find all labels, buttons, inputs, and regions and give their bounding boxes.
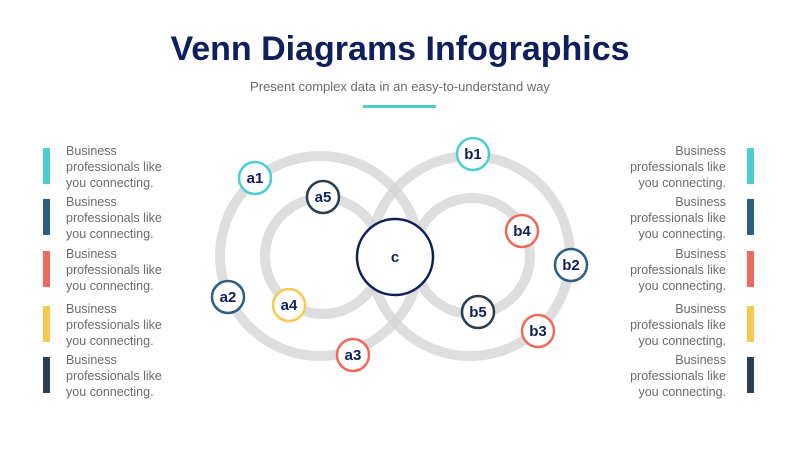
left legend item 3: [43, 247, 162, 293]
right legend item 4: [630, 302, 754, 348]
left legend item 5: professionals like: [66, 369, 162, 383]
node a5: a5: [315, 189, 331, 206]
node a4: [273, 289, 305, 321]
left legend item 1: Business: [66, 144, 117, 158]
right legend item 4: professionals like: [630, 318, 726, 332]
node b4: b4: [513, 223, 531, 240]
left legend item 3: you connecting.: [66, 279, 154, 293]
node a1: [239, 162, 271, 194]
left legend item 5: [43, 353, 162, 399]
right legend item 2: professionals like: [630, 211, 726, 225]
left legend item 1: professionals like: [66, 160, 162, 174]
node a1: a1: [247, 170, 263, 187]
left legend item 5: Business: [66, 353, 117, 367]
right legend item 1: Business: [675, 144, 726, 158]
left legend item 1: [43, 144, 162, 190]
right legend item 4: you connecting.: [638, 334, 726, 348]
left legend item 4: professionals like: [66, 318, 162, 332]
right legend item 3: [630, 247, 754, 293]
right legend item 5: Business: [675, 353, 726, 367]
left legend item 2: professionals like: [66, 211, 162, 225]
left legend item 3: Business: [66, 247, 117, 261]
left legend item 4: Business: [66, 302, 117, 316]
right legend item 1: you connecting.: [638, 176, 726, 190]
node a3: [337, 339, 369, 371]
center circle c: [357, 219, 433, 295]
left legend item 2: you connecting.: [66, 227, 154, 241]
node b2: b2: [562, 257, 580, 274]
node b3: b3: [529, 323, 547, 340]
right legend item 5: [630, 353, 754, 399]
right legend item 1: [630, 144, 754, 190]
right legend item 5: you connecting.: [638, 385, 726, 399]
right legend item 3: professionals like: [630, 263, 726, 277]
node b1: b1: [464, 146, 482, 163]
left legend item 3: professionals like: [66, 263, 162, 277]
left legend item 2: Business: [66, 195, 117, 209]
right legend item 5: professionals like: [630, 369, 726, 383]
right legend item 2: [630, 195, 754, 241]
right legend item 3: you connecting.: [638, 279, 726, 293]
right legend item 2: you connecting.: [638, 227, 726, 241]
rings: [220, 156, 570, 356]
node b2: [555, 249, 587, 281]
right legend item 1: professionals like: [630, 160, 726, 174]
accent line: [363, 105, 436, 108]
node b5: [462, 296, 494, 328]
subtitle: Present complex data in an easy-to-understand way: [250, 79, 550, 94]
node b5: b5: [469, 304, 487, 321]
node b3: [522, 315, 554, 347]
right legend item 3: Business: [675, 247, 726, 261]
left legend item 1: you connecting.: [66, 176, 154, 190]
node a2: [212, 281, 244, 313]
node b1: [457, 138, 489, 170]
node a5: [307, 181, 339, 213]
node b4: [506, 215, 538, 247]
right legend item 2: Business: [675, 195, 726, 209]
node a3: a3: [345, 347, 361, 364]
node a4: a4: [281, 297, 298, 314]
center circle c: c: [391, 249, 399, 266]
left legend item 2: [43, 195, 162, 241]
left legend item 4: you connecting.: [66, 334, 154, 348]
right legend item 4: Business: [675, 302, 726, 316]
title: Venn Diagrams Infographics: [170, 30, 630, 68]
left legend item 4: [43, 302, 162, 348]
node a2: a2: [220, 289, 236, 306]
left legend item 5: you connecting.: [66, 385, 154, 399]
